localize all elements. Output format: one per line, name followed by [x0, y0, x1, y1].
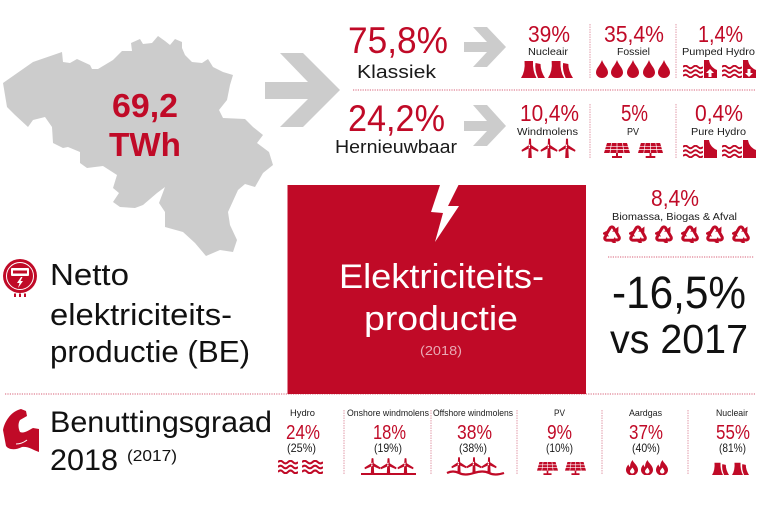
- icon: lightning bolt: [431, 182, 460, 242]
- arrow: main: [265, 53, 340, 127]
- heading: Benuttingsgraad: [50, 406, 272, 477]
- stat: Hernieuwbaar: Hernieuwbaar: [335, 137, 457, 157]
- stat: Hernieuwbaar: [335, 98, 457, 157]
- capacity: Hydro: 24%: [286, 422, 320, 444]
- capacity: Onshore windmolens: 18%: [373, 422, 406, 444]
- stat: Nucleair: Nucleair: [528, 46, 569, 58]
- icon: electricity meter: [3, 259, 37, 297]
- stat: change vs 2017: [610, 267, 748, 362]
- total production value: [109, 87, 181, 163]
- stat: Pumped Hydro: 1,4%: [698, 21, 743, 47]
- capacity: Offshore windmolens: 38%: [457, 422, 492, 444]
- stat: Pure Hydro: Pure Hydro: [691, 126, 746, 138]
- panel title: productie: [364, 300, 518, 338]
- stat: Klassiek: [348, 20, 448, 82]
- heading: Netto elektriciteitsproductie: elektriciteits-: [50, 297, 232, 332]
- arrow: Klassiek: [464, 27, 506, 67]
- stat: change vs 2017: vs 2017: [610, 316, 748, 362]
- heading: Netto elektriciteitsproductie: [50, 257, 250, 369]
- heading: Benuttingsgraad: 2018: [50, 444, 118, 477]
- capacity: Onshore windmolens: (19%): [374, 441, 402, 455]
- capacity: Aardgas: [626, 408, 668, 476]
- capacity: PV: (10%): [546, 441, 573, 455]
- stat: Pumped Hydro: Pumped Hydro: [682, 46, 755, 58]
- capacity: PV: [537, 408, 586, 475]
- stat: Biomassa, Biogas & Afval: 8,4%: [651, 185, 699, 211]
- stat: change vs 2017: -16,5%: [612, 267, 746, 318]
- stat: Windmolens: 10,4%: [520, 100, 579, 126]
- stat: PV: [604, 100, 663, 158]
- stat: Fossiel: Fossiel: [617, 46, 650, 58]
- stat: Hernieuwbaar: 24,2%: [348, 98, 445, 139]
- stat: Klassiek: Klassiek: [357, 61, 437, 82]
- total production value: 69,2: [112, 87, 178, 124]
- heading: Benuttingsgraad: Benuttingsgraad: [50, 406, 272, 439]
- stat: Nucleair: [521, 21, 573, 78]
- stat: Windmolens: [517, 100, 579, 158]
- capacity: Nucleair: [712, 408, 750, 475]
- capacity: Offshore windmolens: [433, 408, 513, 474]
- capacity: Aardgas: (40%): [632, 441, 660, 455]
- stat: Biomassa, Biogas & Afval: Biomassa, Biogas & Afval: [612, 211, 737, 223]
- heading: Netto elektriciteitsproductie: productie (BE): [50, 334, 250, 369]
- panel title: Elektriciteits-: [339, 258, 544, 296]
- capacity: PV: 9%: [547, 422, 572, 444]
- stat: PV: 5%: [621, 100, 648, 126]
- stat: Fossiel: [596, 21, 670, 78]
- capacity: Offshore windmolens: (38%): [459, 441, 487, 455]
- stat: Windmolens: Windmolens: [517, 126, 578, 138]
- stat: PV: PV: [627, 126, 639, 138]
- capacity: PV: PV: [554, 408, 566, 419]
- panel year: (2018): [420, 343, 462, 358]
- capacity: Nucleair: (81%): [719, 441, 746, 455]
- stat: Klassiek: 75,8%: [348, 20, 448, 61]
- capacity: Aardgas: 37%: [629, 422, 663, 444]
- heading: Benuttingsgraad: (2017): [127, 448, 177, 465]
- icon: flexed arm: [3, 409, 39, 452]
- panel title: [339, 258, 544, 338]
- stat: Fossiel: 35,4%: [604, 21, 664, 47]
- capacity: Nucleair: 55%: [716, 422, 750, 444]
- panel: Elektriciteitsproductie: [288, 182, 586, 394]
- stat: Pure Hydro: 0,4%: [695, 100, 743, 126]
- map: Belgium: [3, 36, 273, 256]
- stat: Nucleair: 39%: [528, 21, 570, 47]
- capacity: Hydro: Hydro: [290, 408, 315, 419]
- capacity: Aardgas: Aardgas: [629, 408, 662, 419]
- stat: Pure Hydro: [683, 100, 756, 158]
- capacity: Onshore windmolens: [347, 408, 429, 475]
- total production value: TWh: [109, 126, 181, 163]
- capacity: Onshore windmolens: Onshore windmolens: [347, 408, 429, 419]
- arrow: Hernieuwbaar: [464, 105, 506, 146]
- capacity: Hydro: (25%): [287, 441, 316, 455]
- stat: Biomassa, Biogas & Afval: [601, 185, 751, 245]
- capacity: Hydro: [278, 408, 323, 473]
- stat: Pumped Hydro: [682, 21, 756, 78]
- heading: Netto elektriciteitsproductie: Netto: [50, 257, 129, 292]
- capacity: Nucleair: Nucleair: [716, 408, 748, 419]
- capacity: Offshore windmolens: Offshore windmolens: [433, 408, 513, 419]
